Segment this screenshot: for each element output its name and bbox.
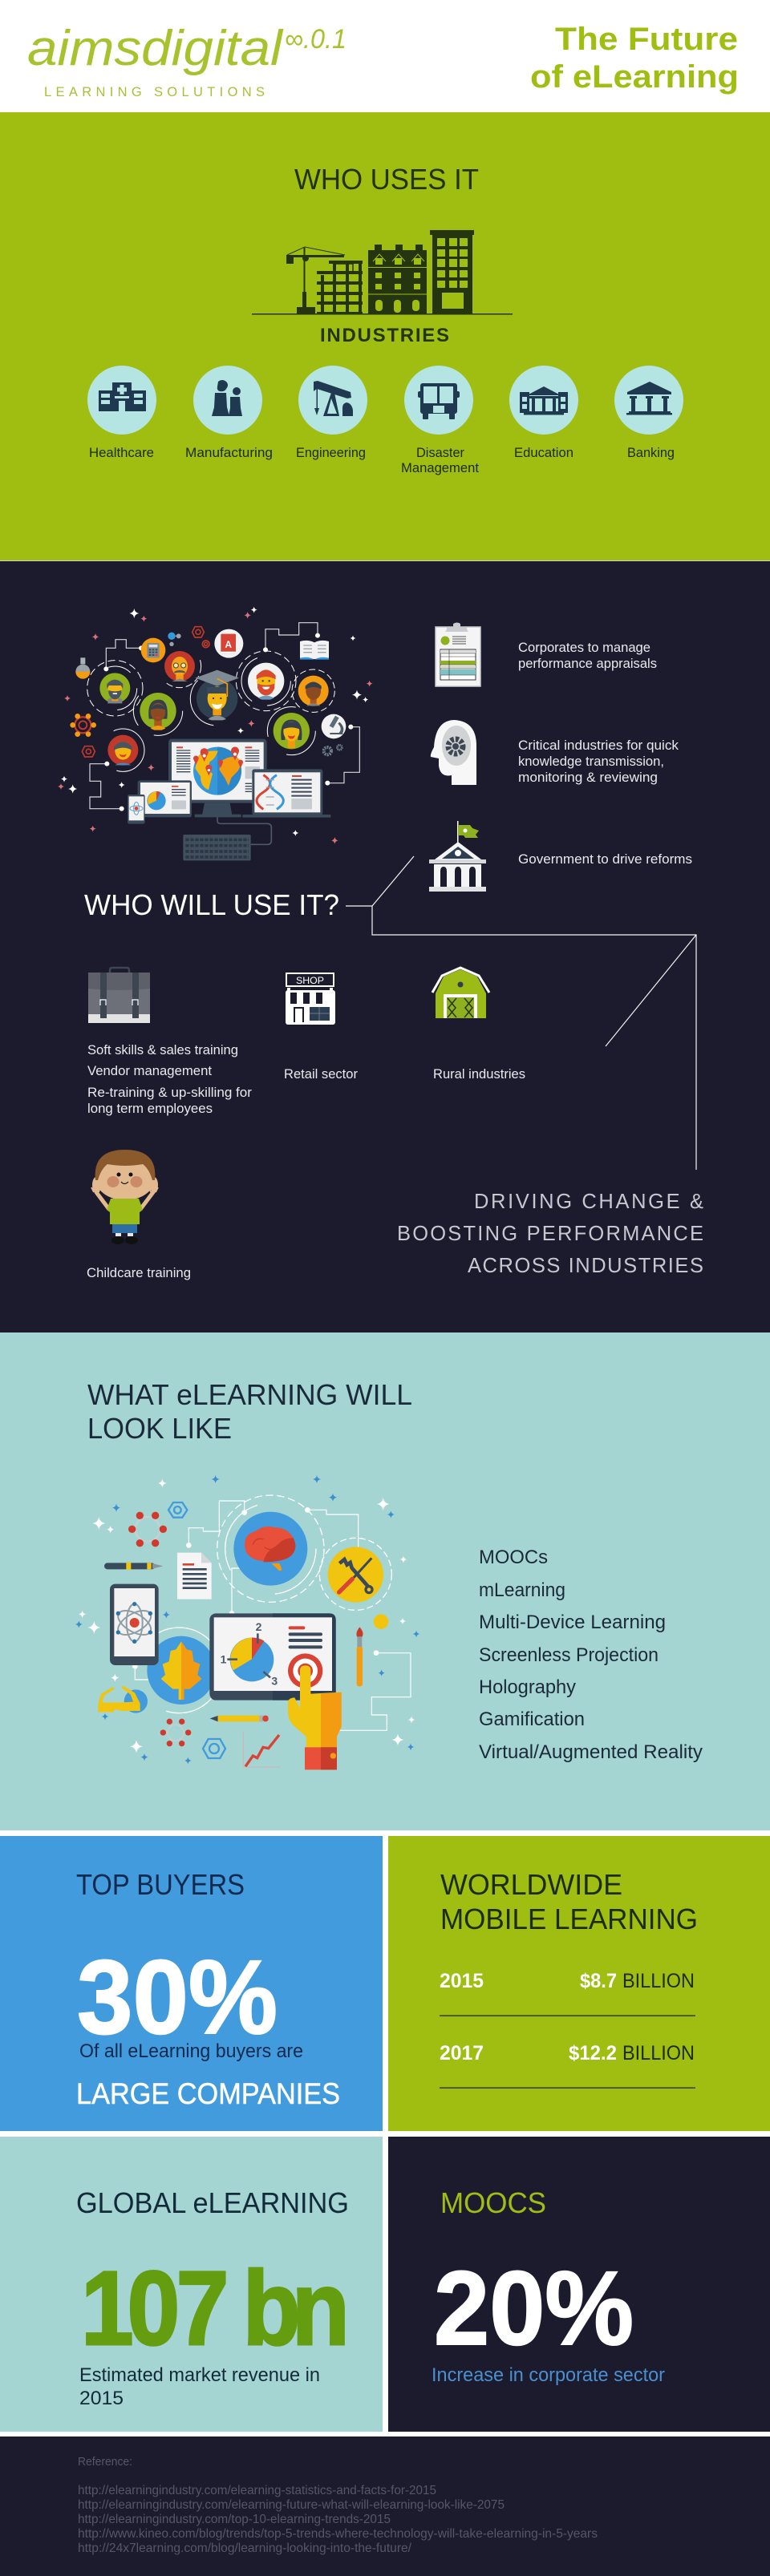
text: increase in corporate sector: Increase in corporate sector [432, 2364, 665, 2386]
icon: paint brush [356, 1614, 388, 1686]
icon: red book [214, 629, 243, 658]
icon: document [177, 1553, 212, 1599]
stat row: 2017: BILLION [622, 2042, 695, 2064]
stat row: 2015: 2015 [440, 1970, 484, 1992]
icon: disaster management truck [404, 366, 473, 435]
text: critical industries: Critical industries for quick [518, 738, 679, 753]
text: skills training list [87, 1042, 252, 1116]
text: reference urls: http://www.kineo.com/blog/trends/top-5-trends-where-technology-will-take-elearning-in-5-years [78, 2527, 598, 2541]
industry labels: Engineering [296, 445, 366, 460]
text: critical industries: knowledge transmission, [518, 754, 664, 769]
icon: boy [91, 1150, 158, 1244]
icon: banking [614, 366, 683, 435]
icon: head with gear [431, 720, 476, 785]
heading: worldwide mobile learning: MOBILE LEARNING [440, 1903, 698, 1935]
list: learning formats: Screenless Projection [479, 1644, 659, 1666]
text: reference urls: http://elearningindustry.com/elearning-future-what-will-elearning-look-like-2075 [78, 2498, 505, 2512]
text: childcare: Childcare training [87, 1265, 191, 1280]
text: government: Government to drive reforms [518, 851, 692, 867]
logo tagline: LEARNING SOLUTIONS [44, 85, 265, 99]
list: learning formats: mLearning [479, 1579, 565, 1601]
text: critical industries: monitoring & reviewing [518, 770, 658, 785]
icon: calculator [141, 638, 165, 662]
icon: pointing hand [288, 1665, 342, 1769]
tagline: driving change: BOOSTING PERFORMANCE [397, 1223, 703, 1245]
icon: line chart [243, 1733, 281, 1767]
illustration: people and devices network [58, 607, 373, 860]
device: tablet with pie chart [138, 780, 192, 817]
tagline: driving change: DRIVING CHANGE & [474, 1191, 703, 1213]
heading: what elearning will look like: WHAT eLEARNING WILL [87, 1378, 412, 1411]
industry labels: Education [514, 445, 573, 460]
text: skills training list: Re-training & up-skilling for [87, 1085, 252, 1100]
icon: molecule [168, 633, 181, 646]
text: reference urls: http://24x7learning.com/blog/learning-looking-into-the-future/ [78, 2542, 412, 2555]
industry labels [89, 445, 675, 475]
icon: pencil [210, 1716, 269, 1721]
heading: top buyers: TOP BUYERS [76, 1868, 245, 1901]
text: corporates [518, 640, 657, 671]
icon: hexagon nut [168, 1502, 225, 1758]
icon: molecule rings [128, 1512, 191, 1746]
stat: 20%: 20% [434, 2249, 634, 2367]
tagline: driving change: ACROSS INDUSTRIES [468, 1255, 703, 1277]
icon: tablet with pie chart: 1 [221, 1653, 227, 1666]
text: skills training list: long term employees [87, 1101, 213, 1116]
icon: barn [432, 968, 489, 1018]
text: reference urls: http://elearningindustry.com/top-10-elearning-trends-2015 [78, 2513, 391, 2526]
avatar: woman on red [107, 735, 138, 766]
heading: moocs: MOOCS [440, 2186, 546, 2219]
icon: engineering [298, 366, 367, 435]
list: learning formats: Multi-Device Learning [479, 1612, 666, 1633]
page title: of eLearning [530, 59, 739, 95]
stat row: 2017: 2017 [440, 2042, 484, 2064]
stat row: 2015 [440, 1970, 695, 1992]
heading: what elearning will look like: LOOK LIKE [87, 1412, 232, 1445]
icon: government building with flag [429, 821, 486, 892]
industry labels: Banking [627, 445, 675, 460]
icon: tablet with pie chart: 3 [271, 1675, 278, 1688]
icon: briefcase [88, 968, 150, 1023]
block: government [429, 821, 692, 892]
icon: open book [300, 641, 329, 660]
page title: The Future [555, 22, 738, 57]
label: industries: INDUSTRIES [320, 325, 449, 346]
icon: virtual reality glasses [98, 1686, 148, 1713]
industry labels: Disaster [416, 445, 464, 460]
icon: tools [328, 1547, 383, 1603]
avatar: dark woman on green [140, 693, 176, 730]
device: phone [128, 795, 145, 824]
text: skills training list: Vendor management [87, 1063, 212, 1078]
icon: brain [233, 1512, 307, 1586]
heading: who uses it: WHO USES IT [294, 163, 479, 196]
industry labels: Management [401, 460, 479, 475]
text: reference urls: http://elearningindustry.com/elearning-statistics-and-facts-for-2015 [78, 2484, 436, 2497]
block: skills training [87, 968, 252, 1116]
icon: tablet with pie chart: 2 [256, 1620, 262, 1633]
heading: worldwide mobile learning: WORLDWIDE [440, 1868, 622, 1901]
list: learning formats: Holography [479, 1676, 576, 1698]
device: monitor with globe [168, 739, 267, 817]
heading: what elearning will look like [87, 1378, 412, 1445]
panel: who uses it [0, 112, 770, 560]
list: learning formats [479, 1547, 703, 1763]
text: estimated market revenue: 2015 [79, 2388, 124, 2409]
stat row: 2015: BILLION [622, 1970, 695, 1992]
icon: phone with atom [110, 1584, 159, 1665]
icon: education building [509, 366, 578, 435]
avatar: green bearded man [99, 673, 130, 703]
device: laptop with DNA [242, 769, 330, 818]
stat: 107 bn: 107 bn [81, 2250, 350, 2367]
block: corporates [436, 622, 657, 686]
avatar: woman on green [274, 713, 310, 749]
text: of all elearning buyers: Of all eLearning buyers are [79, 2040, 303, 2062]
icons: hexagon nuts [82, 627, 209, 757]
logo wordmark: aimsdigital [27, 21, 284, 76]
industry labels: Healthcare [89, 445, 154, 460]
heading: global elearning: GLOBAL eLEARNING [76, 2186, 349, 2219]
block: childcare [87, 1150, 191, 1280]
icon: orange molecule ring [70, 714, 96, 737]
icon: microscope [322, 714, 346, 738]
stat row: 2015: $8.7 [580, 1970, 617, 1992]
icon: clipboard [436, 622, 480, 686]
text: critical industries [518, 738, 679, 785]
illustration: learning technology [75, 1475, 419, 1769]
text: skills training list: Soft skills & sales training [87, 1042, 238, 1057]
icon: city skyline [252, 230, 513, 314]
panel: moocs [388, 2137, 770, 2432]
icon: healthcare [87, 366, 156, 435]
connector lines [346, 856, 696, 1170]
block: critical industries [431, 720, 679, 785]
icon: gears [324, 745, 342, 754]
header panel [27, 21, 739, 99]
panel: global elearning [0, 2137, 383, 2432]
block: retail [284, 973, 358, 1082]
text: corporates: performance appraisals [518, 656, 657, 671]
icon: flask [75, 657, 90, 679]
text: retail: Retail sector [284, 1066, 358, 1082]
block: rural [432, 968, 525, 1082]
page title [530, 22, 739, 95]
panel: who will use it [0, 561, 770, 1332]
text: rural: Rural industries [433, 1066, 525, 1082]
list: learning formats: MOOCs [479, 1547, 548, 1568]
icon: manufacturing [193, 366, 262, 435]
tagline: driving change [397, 1191, 703, 1277]
panel: top buyers [0, 1836, 383, 2131]
panel: what elearning will look like [0, 1332, 770, 1830]
avatar: man on orange [298, 676, 329, 706]
logo version mark: ∞.0.1 [285, 24, 346, 55]
text: large companies: LARGE COMPANIES [76, 2077, 340, 2110]
icon: leaf [147, 1636, 216, 1705]
industry labels: Manufacturing [185, 445, 273, 460]
heading: worldwide mobile learning [440, 1868, 698, 1935]
icon: pen [104, 1563, 163, 1570]
text: estimated market revenue [79, 2364, 320, 2409]
heading: who will use it: WHO WILL USE IT? [84, 888, 339, 921]
panel: references [0, 2436, 770, 2576]
list: learning formats: Virtual/Augmented Reality [479, 1741, 703, 1763]
list: learning formats: Gamification [479, 1709, 585, 1730]
text: corporates: Corporates to manage [518, 640, 650, 655]
icon: red book: A [225, 639, 232, 650]
stat: 30%: 30% [77, 1938, 278, 2056]
icon: tablet with pie chart [209, 1613, 336, 1700]
text: reference urls [78, 2484, 598, 2555]
panel: worldwide mobile learning [388, 1836, 770, 2131]
stat row: 2017 [440, 2042, 695, 2064]
text: estimated market revenue: Estimated market revenue in [79, 2364, 320, 2386]
avatar: bald man with glasses [164, 651, 195, 681]
avatar: graduate [195, 670, 239, 720]
text: reference label: Reference: [78, 2455, 132, 2469]
device: keyboard [183, 835, 251, 860]
stat row: 2017: $12.2 [569, 2042, 617, 2064]
avatar: red-haired bearded man [248, 663, 284, 700]
icon: shop: SHOP [296, 975, 324, 986]
